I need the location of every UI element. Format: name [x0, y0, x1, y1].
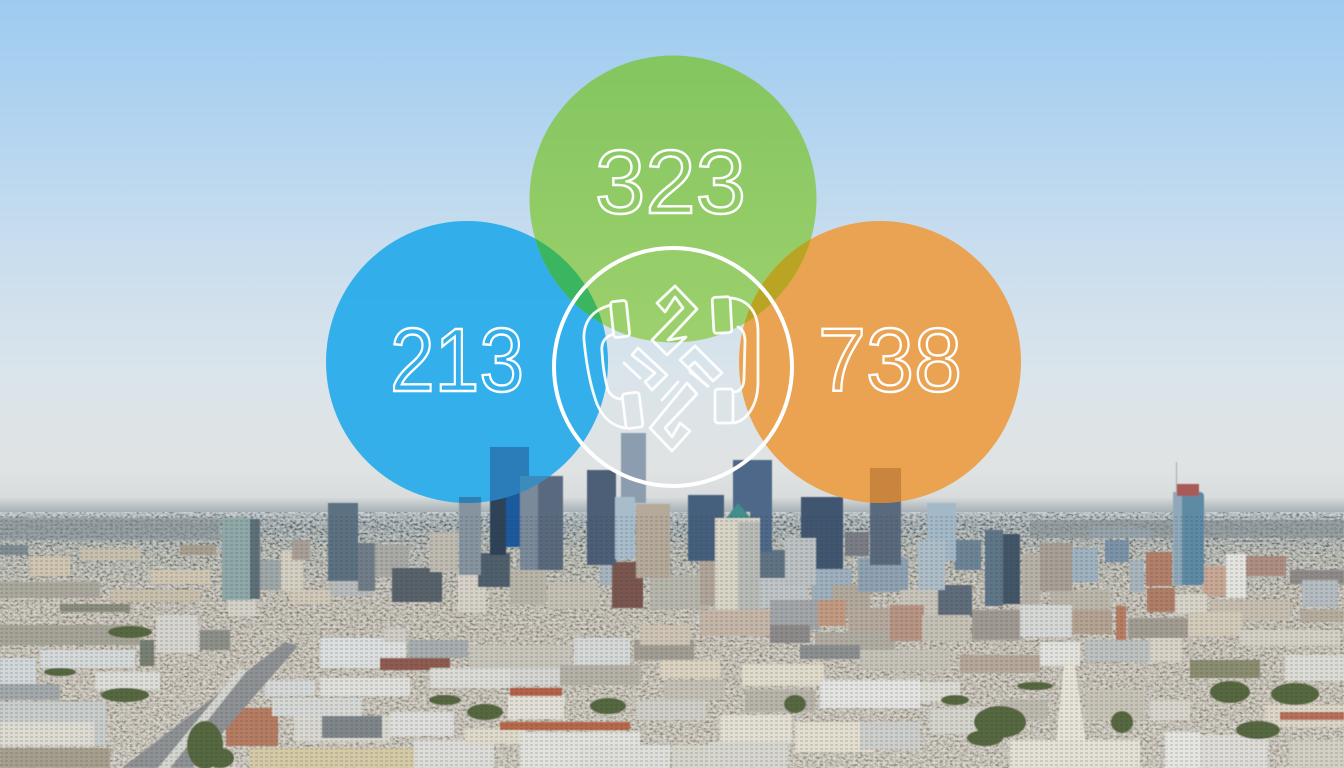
number: 738: 738	[818, 311, 962, 411]
overlap: blue and green	[535, 238, 603, 324]
ring: white center circle	[554, 248, 792, 486]
trees	[44, 626, 1319, 768]
mid-distance blocks	[228, 532, 1344, 620]
towers seen through blue circle	[459, 447, 550, 503]
overlap: orange and green	[744, 239, 811, 324]
downtown towers	[222, 433, 1204, 622]
lower foreground buildings	[0, 665, 1344, 768]
cream art deco tower	[715, 503, 760, 622]
buildings group with slight softening	[0, 433, 1344, 768]
number: 213: 213	[390, 311, 524, 411]
icon: bottom arrow	[650, 382, 697, 451]
circle: green 323	[530, 56, 816, 342]
tower seen through orange circle	[870, 468, 901, 506]
icon: left arrow	[624, 348, 667, 390]
city ground base	[0, 498, 1344, 768]
church tower and hall	[1010, 646, 1140, 768]
icon: right arrow	[680, 346, 722, 386]
background: sky gradient	[0, 0, 1344, 510]
tall glass tower right	[1173, 462, 1204, 585]
middle buildings row	[0, 600, 1344, 696]
tower left	[222, 518, 260, 600]
icon: left handset	[584, 300, 643, 429]
background: city skyline photo approximation	[0, 433, 1344, 768]
building window texture	[0, 515, 1344, 768]
circle: blue 213	[326, 221, 608, 503]
icon: right handset	[712, 297, 758, 423]
far city blocks	[0, 518, 1344, 622]
circle: orange 738	[739, 221, 1021, 503]
ground speckle texture	[0, 512, 1344, 768]
highway	[122, 642, 298, 768]
number: 323: 323	[595, 133, 746, 233]
icon: top arrow	[652, 286, 697, 355]
icon: two phone handsets and arrows	[584, 286, 758, 451]
